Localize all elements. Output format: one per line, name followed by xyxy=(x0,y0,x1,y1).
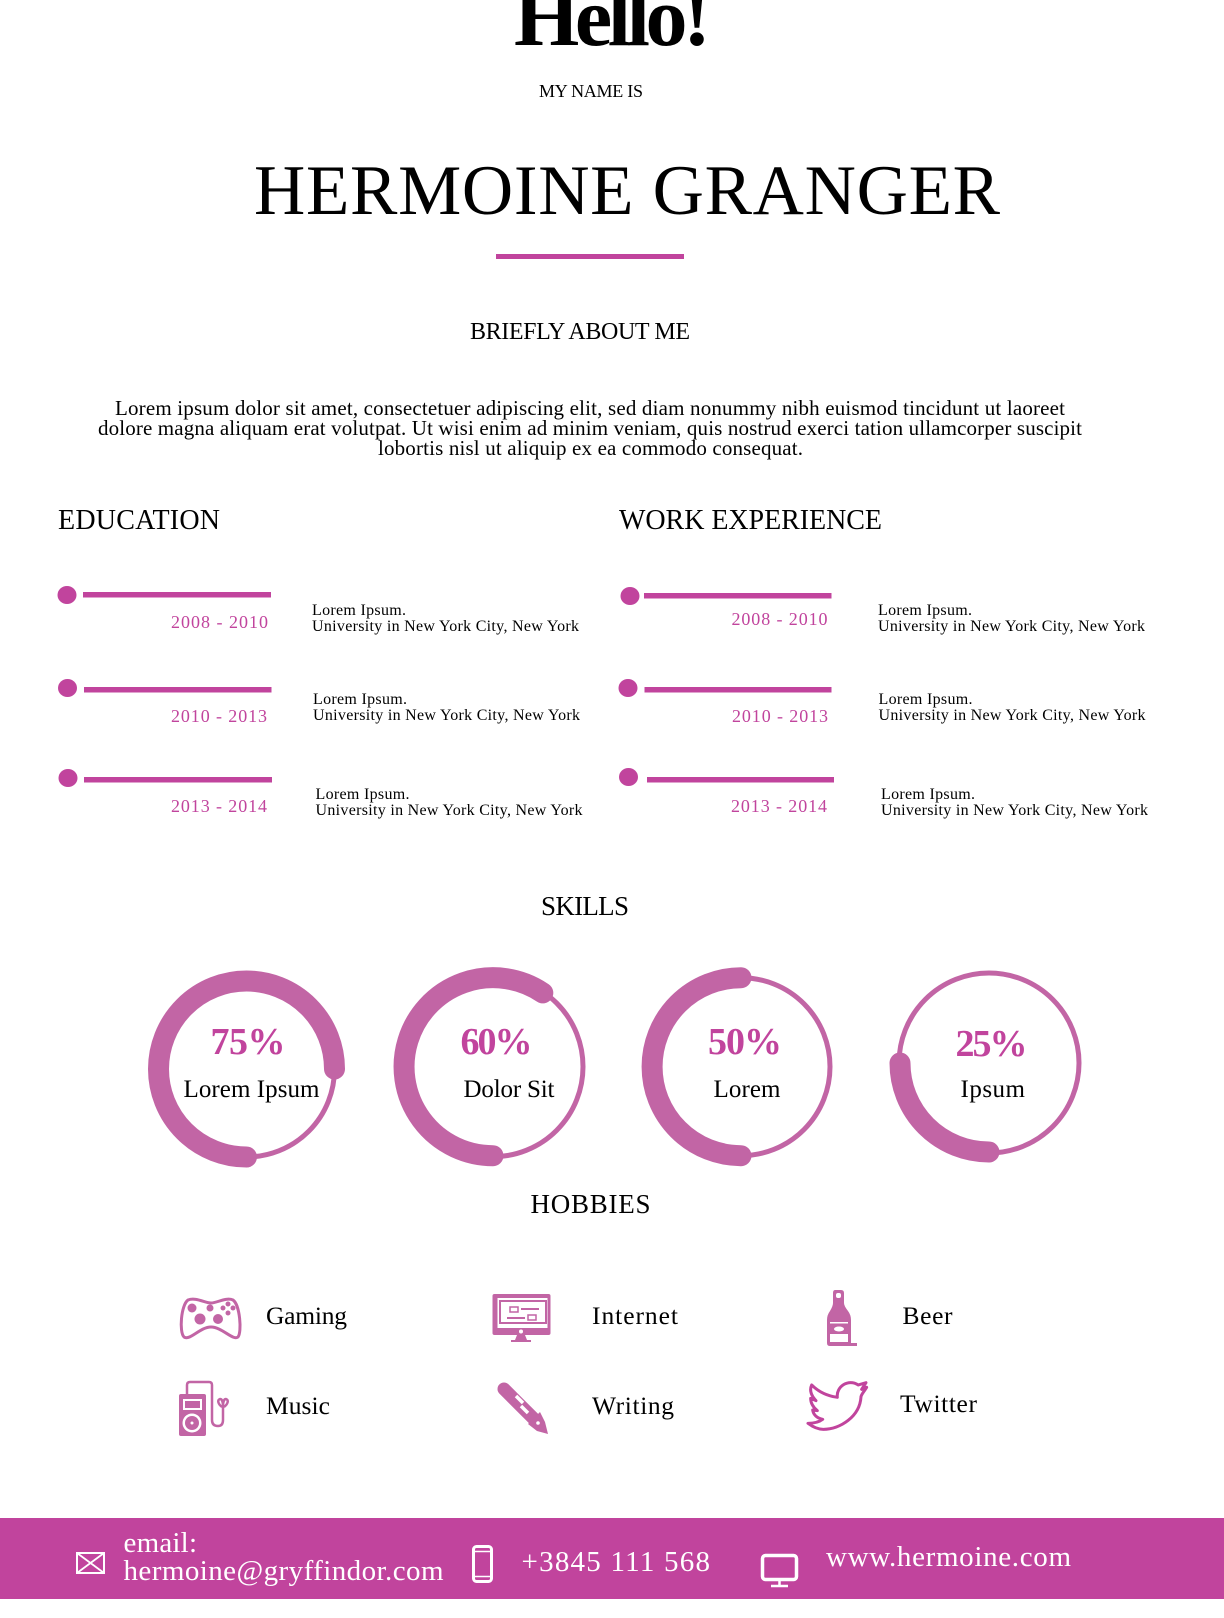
education entry 2008-2010: 2008 - 2010 xyxy=(171,612,268,632)
icon: twitter bird xyxy=(808,1383,867,1429)
education entry 2008-2010: University in New York City, New York xyxy=(312,618,579,635)
subtitle: my name is: MY NAME IS xyxy=(539,81,643,101)
education entry 2010-2013: 2010 - 2013 xyxy=(171,706,267,726)
donut: 25% Ipsum: 25% xyxy=(956,1023,1028,1065)
icon: phone xyxy=(474,1546,492,1582)
footer contact band xyxy=(0,1518,1224,1599)
heading: hobbies: HOBBIES xyxy=(530,1189,650,1219)
name underline xyxy=(496,254,684,259)
icon: beer bottle xyxy=(827,1290,857,1346)
work entry 2008-2010: 2008 - 2010 xyxy=(732,609,828,629)
panel: hobbies xyxy=(179,1290,978,1436)
donut: 50% Lorem: Lorem xyxy=(714,1076,781,1103)
name heading: HERMOINE GRANGER xyxy=(254,152,1001,230)
donut: 25% Ipsum xyxy=(899,973,1079,1153)
label: music: Music xyxy=(266,1391,330,1420)
label: writing: Writing xyxy=(592,1391,674,1420)
work entry 2013-2014: University in New York City, New York xyxy=(881,802,1148,819)
donut: 75% Lorem Ipsum: 75% xyxy=(210,1021,286,1063)
donut: 60% Dolor Sit xyxy=(403,977,583,1157)
work entry 2010-2013: University in New York City, New York xyxy=(878,707,1146,724)
work entry 2013-2014: 2013 - 2014 xyxy=(731,796,827,816)
email text xyxy=(124,1527,444,1587)
heading: education: EDUCATION xyxy=(58,505,220,536)
education entry 2010-2013: University in New York City, New York xyxy=(313,707,580,724)
work entry 2008-2010 xyxy=(620,587,1145,635)
heading: skills: SKILLS xyxy=(541,891,629,921)
work entry 2010-2013 xyxy=(618,679,1146,726)
work entry 2010-2013: 2010 - 2013 xyxy=(732,706,828,726)
email text: hermoine@gryffindor.com xyxy=(124,1555,444,1587)
work entry 2010-2013: Lorem Ipsum. xyxy=(878,691,972,708)
phone number: +3845 111 568 xyxy=(522,1546,710,1578)
email text: email: xyxy=(124,1527,197,1559)
education entry 2010-2013 xyxy=(58,679,580,726)
label: internet: Internet xyxy=(592,1301,678,1330)
label: beer: Beer xyxy=(902,1301,953,1330)
icon: music player xyxy=(179,1382,228,1436)
work entry 2008-2010: University in New York City, New York xyxy=(878,618,1145,635)
panel: education xyxy=(58,505,582,819)
label: gaming: Gaming xyxy=(266,1301,347,1330)
about paragraph: dolore magna aliquam erat volutpat. Ut wisi enim ad minim veniam, quis nostrud exerci tation ullamcorper suscipit xyxy=(98,416,1082,440)
icon: envelope xyxy=(77,1553,104,1573)
icon: pen xyxy=(504,1389,548,1434)
donut: 75% Lorem Ipsum xyxy=(158,981,334,1157)
education entry 2008-2010 xyxy=(58,586,579,635)
education entry 2013-2014 xyxy=(58,769,582,819)
donut: 50% Lorem: 50% xyxy=(708,1021,782,1063)
work entry 2013-2014: Lorem Ipsum. xyxy=(881,786,975,803)
heading: work experience: WORK EXPERIENCE xyxy=(619,505,882,536)
donut: 60% Dolor Sit: 60% xyxy=(460,1021,532,1063)
panel: work experience xyxy=(618,505,1148,819)
label: twitter: Twitter xyxy=(900,1389,978,1418)
education entry 2013-2014: 2013 - 2014 xyxy=(171,796,267,816)
work entry 2008-2010: Lorem Ipsum. xyxy=(878,602,972,619)
heading: briefly about me: BRIEFLY ABOUT ME xyxy=(470,319,690,345)
about paragraph xyxy=(98,396,1082,460)
donut: 60% Dolor Sit: Dolor Sit xyxy=(464,1076,555,1103)
donut: 25% Ipsum: Ipsum xyxy=(960,1076,1026,1103)
donut: 50% Lorem xyxy=(652,978,830,1156)
about paragraph: lobortis nisl ut aliquip ex ea commodo consequat. xyxy=(378,436,803,460)
website: www.hermoine.com xyxy=(826,1541,1071,1573)
about paragraph: Lorem ipsum dolor sit amet, consectetuer adipiscing elit, sed diam nonummy nibh euismod tincidunt ut laoreet xyxy=(115,396,1065,420)
icon: desktop monitor xyxy=(492,1294,550,1342)
work entry 2013-2014 xyxy=(619,768,1148,819)
donut: 75% Lorem Ipsum: Lorem Ipsum xyxy=(184,1076,320,1103)
education entry 2008-2010: Lorem Ipsum. xyxy=(312,602,406,619)
education entry 2013-2014: Lorem Ipsum. xyxy=(316,786,410,803)
education entry 2013-2014: University in New York City, New York xyxy=(316,802,582,819)
icon: computer monitor xyxy=(762,1556,796,1586)
education entry 2010-2013: Lorem Ipsum. xyxy=(313,691,407,708)
panel: skills charts xyxy=(158,973,1079,1157)
icon: gamepad xyxy=(181,1299,240,1338)
